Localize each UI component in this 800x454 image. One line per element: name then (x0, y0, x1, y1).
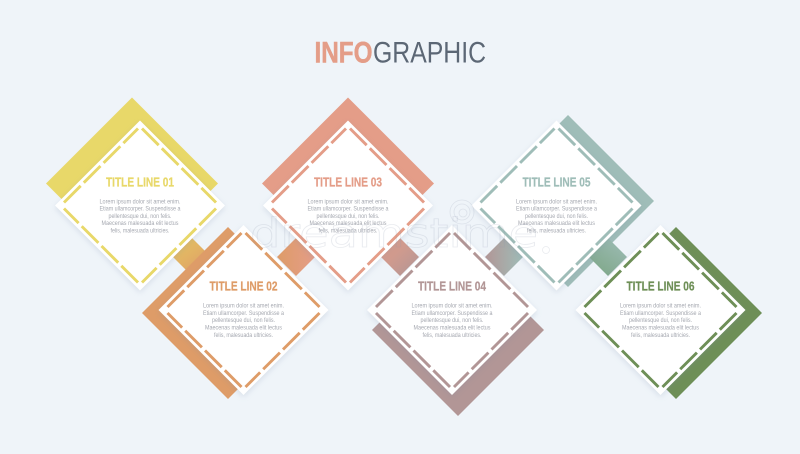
text block 05: Maecenas malesuada elit lectus (518, 220, 595, 227)
text block 06: Maecenas malesuada elit lectus (622, 324, 699, 332)
panel: card 04 (367, 225, 537, 395)
text block 04: Lorem ipsum dolor sit amet enim. (412, 303, 493, 310)
text block 04: felis, malesuada ultricies. (422, 332, 482, 339)
text block 01: Etiam ullamcorper. Suspendisse a (100, 206, 181, 213)
band: 01 yellow (46, 98, 218, 270)
panel: card 01 (55, 120, 225, 290)
text block 01: pellentesque dui, non felis. (108, 213, 172, 220)
band: 03 salmon (262, 98, 434, 270)
dashed outline 01 (64, 128, 216, 282)
text block 05: Etiam ullamcorper. Suspendisse a (516, 206, 597, 213)
heading 01: TITLE LINE 01 (106, 174, 174, 190)
dashed outline 06 (584, 233, 736, 387)
text block 02: felis, malesuada ultricies. (214, 332, 273, 339)
text block 06: felis, malesuada ultricies. (631, 332, 690, 339)
watermark: dreamstime (250, 211, 538, 257)
watermark (250, 200, 550, 257)
text block 04 (412, 303, 493, 339)
band: 02 orange (142, 227, 314, 399)
title: GRAPHIC (373, 36, 486, 70)
connector: 03 to 04 (381, 238, 419, 276)
band: 06 green (590, 227, 762, 399)
text block 02 (203, 303, 284, 339)
text block 05 (516, 198, 597, 234)
text block 03 (308, 198, 389, 234)
title (314, 36, 486, 70)
text block 05: felis, malesuada ultricies. (527, 228, 586, 234)
panel: card 05 (472, 120, 642, 290)
text block 01: Lorem ipsum dolor sit amet enim. (100, 198, 181, 205)
heading 04: TITLE LINE 04 (418, 278, 487, 294)
heading 02: TITLE LINE 02 (210, 278, 278, 294)
text block 05: pellentesque dui, non felis. (525, 213, 588, 220)
text block 02: Maecenas malesuada elit lectus (205, 324, 282, 332)
text block 05: Lorem ipsum dolor sit amet enim. (516, 198, 597, 205)
panel: card 02 (158, 225, 328, 395)
panel: card 03 (263, 120, 433, 290)
connector: 04 to 05 (485, 238, 523, 276)
text block 03: Maecenas malesuada elit lectus (310, 220, 386, 227)
connector: 05 to 06 (589, 238, 627, 276)
text block 01 (100, 198, 181, 234)
text block 04: Maecenas malesuada elit lectus (414, 324, 490, 332)
dashed outline 04 (376, 233, 528, 387)
text block 06: Etiam ullamcorper. Suspendisse a (620, 310, 701, 317)
band: 04 mauve (372, 244, 544, 416)
text block 02: Etiam ullamcorper. Suspendisse a (203, 310, 284, 317)
connector: 01 to 02 (173, 238, 211, 276)
panel: card 06 (576, 225, 746, 395)
text block 06 (620, 303, 701, 339)
text block 02: pellentesque dui, non felis. (212, 317, 275, 324)
band: 05 teal (482, 115, 654, 287)
text block 03: Etiam ullamcorper. Suspendisse a (308, 206, 389, 213)
dashed outline 05 (480, 128, 632, 282)
dashed outline 03 (272, 128, 424, 282)
dashed outline 02 (168, 233, 320, 387)
connector: 02 to 03 (277, 238, 315, 276)
text block 01: Maecenas malesuada elit lectus (102, 220, 178, 227)
heading 06: TITLE LINE 06 (626, 278, 694, 294)
title: INFO (314, 36, 372, 70)
text block 01: felis, malesuada ultricies. (110, 228, 170, 234)
heading 03: TITLE LINE 03 (314, 174, 382, 190)
text block 06: pellentesque dui, non felis. (629, 317, 692, 324)
heading 05: TITLE LINE 05 (522, 174, 590, 190)
text block 03: pellentesque dui, non felis. (316, 213, 380, 220)
text block 04: Etiam ullamcorper. Suspendisse a (412, 310, 493, 317)
text block 03: felis, malesuada ultricies. (318, 228, 378, 234)
text block 04: pellentesque dui, non felis. (420, 317, 484, 324)
text block 03: Lorem ipsum dolor sit amet enim. (308, 198, 389, 205)
text block 02: Lorem ipsum dolor sit amet enim. (203, 303, 284, 310)
text block 06: Lorem ipsum dolor sit amet enim. (620, 303, 701, 310)
